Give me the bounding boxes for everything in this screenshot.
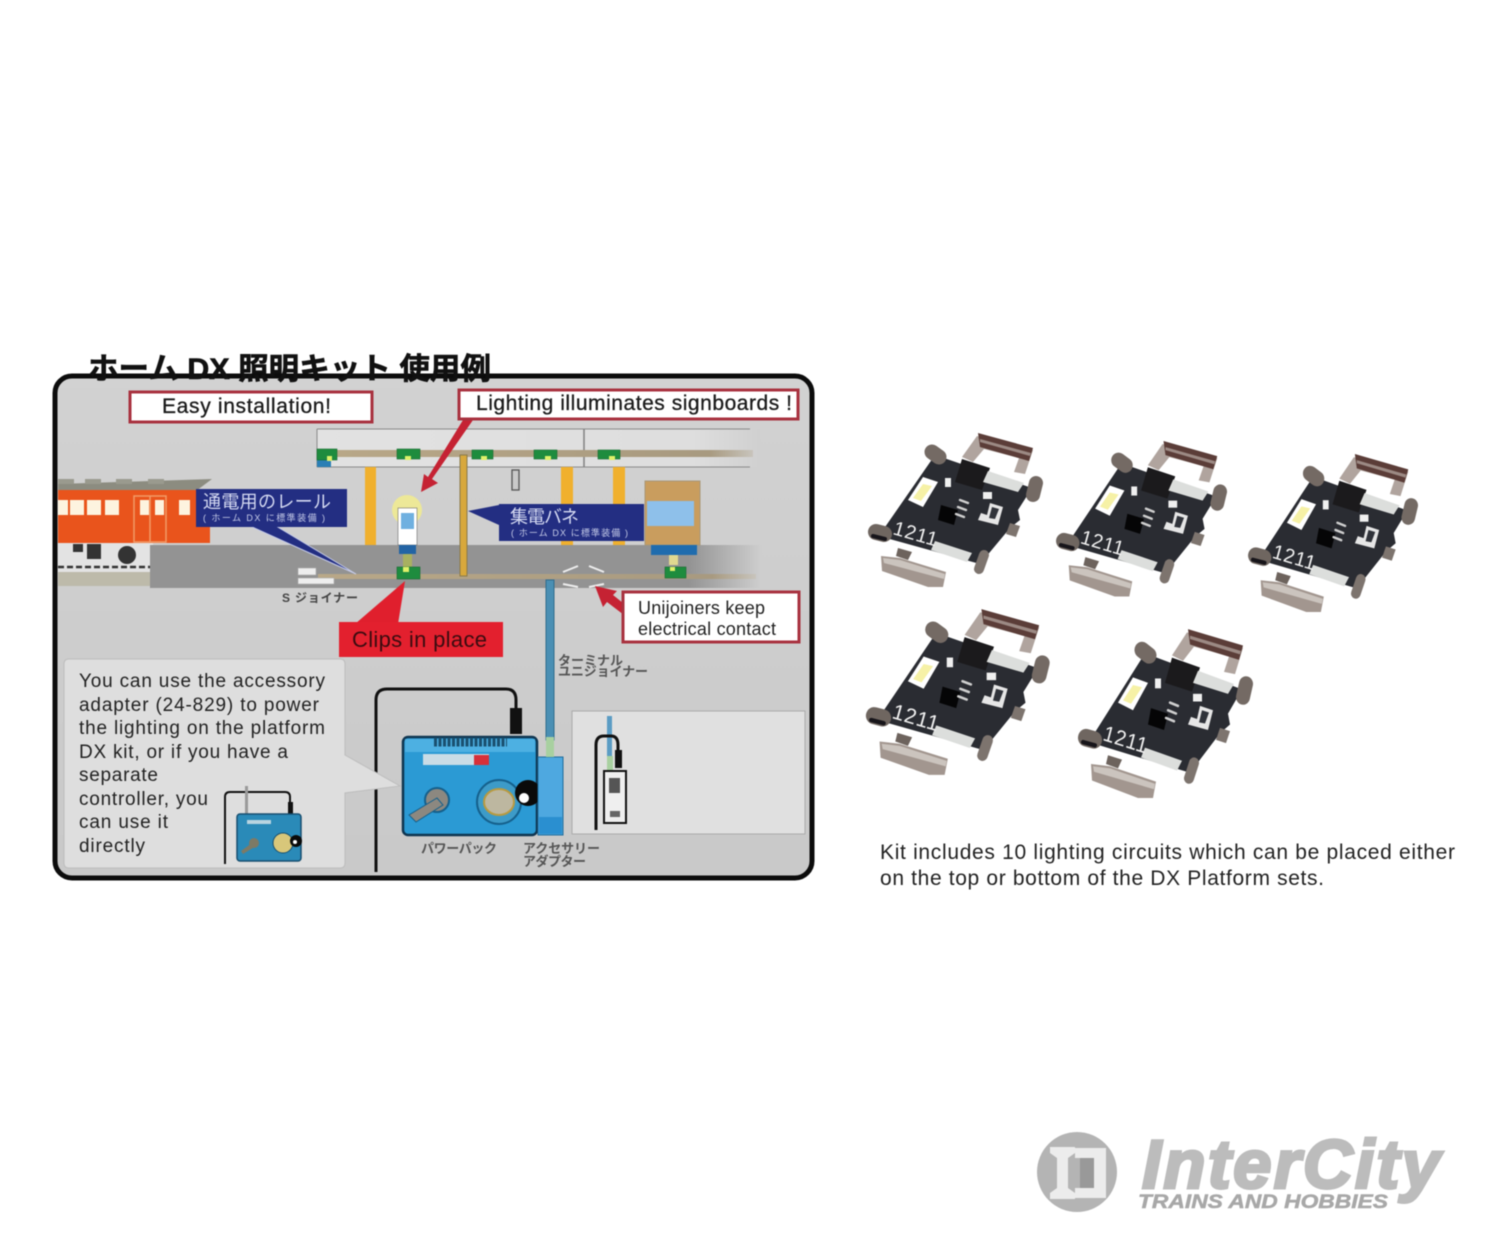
green clips	[317, 449, 686, 579]
callout: accessory adapter note: You can use the accessory	[79, 671, 326, 692]
power pack	[403, 737, 541, 835]
callout: accessory adapter note: controller, you	[79, 789, 208, 810]
callout: accessory adapter note: DX kit, or if you have a	[79, 742, 288, 763]
caption: on the top or bottom of the DX Platform sets.	[880, 867, 1324, 890]
callout: accessory adapter note: adapter (24-829) to power	[79, 695, 320, 716]
blue callout: collector spring	[468, 504, 644, 541]
callout: easy installation	[130, 392, 372, 422]
adapter label: アクセサリー	[523, 841, 600, 856]
blue callout: powered rail	[196, 489, 356, 574]
logo tagline: TRAINS AND HOBBIES	[1138, 1192, 1388, 1213]
power cable	[376, 689, 516, 872]
caption: Kit includes 10 lighting circuits which can be placed either	[880, 841, 1455, 864]
inset panel: adapter wiring	[572, 711, 805, 834]
signboard lit	[392, 495, 422, 567]
caption	[880, 841, 1455, 890]
blue callout: collector spring: 集電バネ	[510, 507, 579, 527]
train	[58, 479, 212, 586]
lighting circuit 5	[1083, 629, 1246, 798]
blue callout: powered rail: 通電用のレール	[203, 492, 331, 512]
signboard rail assembly	[317, 429, 760, 467]
callout: unijoiners: electrical contact	[638, 619, 776, 639]
circuit number: 1211	[1270, 541, 1318, 575]
S joiner label: S ジョイナー	[282, 591, 358, 605]
arrow: unijoiners	[595, 586, 628, 615]
platform	[150, 545, 762, 588]
callout: lighting illuminates: Lighting illuminates signboards !	[476, 392, 792, 415]
terminal unijoiner label: ユニジョイナー	[558, 664, 648, 679]
callout: unijoiners: Unijoiners keep	[638, 598, 765, 618]
blue callout: powered rail: ( ホーム DX に標準装備 )	[203, 512, 325, 523]
logo badge	[1037, 1132, 1117, 1212]
lighting circuit 4	[871, 609, 1042, 775]
circuit number: 1211	[891, 518, 940, 551]
power pack label: パワーパック	[421, 841, 497, 856]
adapter label: アダプター	[523, 854, 586, 869]
callout: clips in place: Clips in place	[352, 627, 487, 652]
platform rail	[318, 574, 756, 579]
circuit number: 1211	[1101, 722, 1150, 759]
mini power pack	[225, 786, 302, 864]
blue callout: collector spring: ( ホーム DX に標準装備 )	[511, 527, 628, 538]
terminal unijoiner wire	[546, 580, 554, 740]
arrow: clips in place	[355, 581, 405, 624]
title: ホーム DX 照明キット 使用例	[88, 353, 491, 386]
orange support columns	[365, 467, 625, 545]
accessory adapter	[538, 737, 563, 835]
terminal unijoiner label: ターミナル	[558, 653, 623, 668]
clip LEDs	[327, 456, 675, 572]
adapter label	[523, 841, 600, 869]
callout: clips in place	[339, 622, 503, 657]
collector spring	[460, 455, 467, 576]
callout: accessory adapter note	[64, 659, 400, 868]
unijoiner	[563, 566, 604, 587]
terminal unijoiner label	[558, 653, 648, 679]
callout: accessory adapter note: the lighting on the platform	[79, 718, 325, 739]
lighting circuit 2	[1061, 441, 1220, 597]
callout: easy installation: Easy installation!	[162, 395, 331, 418]
lighting circuit 3	[1253, 454, 1411, 612]
small pendant	[512, 470, 519, 490]
lighting circuit 1	[873, 433, 1036, 587]
callout: accessory adapter note: can use it	[79, 812, 169, 833]
callout: accessory adapter note: separate	[79, 765, 158, 786]
logo wordmark: InterCity	[1142, 1126, 1444, 1203]
panel frame	[55, 376, 812, 878]
S joiner	[298, 568, 334, 584]
power plug	[510, 708, 522, 734]
callout: unijoiners	[623, 592, 799, 642]
station box	[645, 481, 700, 565]
panel: usage diagram	[55, 353, 812, 878]
circuit number: 1211	[890, 699, 942, 736]
callout: accessory adapter note: directly	[79, 836, 146, 857]
logo: InterCity	[1037, 1126, 1444, 1213]
arrow: signboard lighting	[421, 420, 473, 492]
circuit number: 1211	[1078, 526, 1126, 560]
